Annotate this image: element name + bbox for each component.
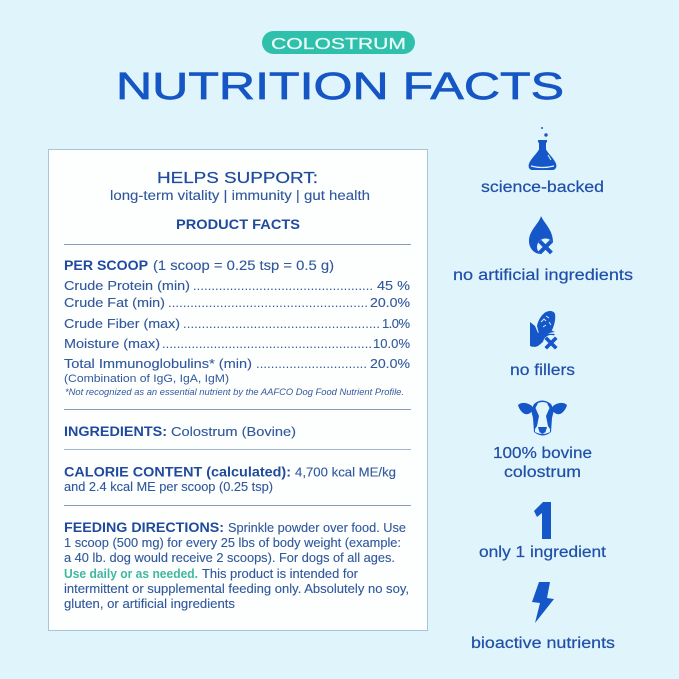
row: total immunoglobulins: Total Immunoglobulins* (min) [64, 356, 252, 371]
benefit: 100% bovine colostrum: colostrum [504, 464, 581, 481]
row: total immunoglobulins: 20.0% [370, 356, 410, 371]
ingredients section [64, 424, 296, 439]
row: crude protein: Crude Protein (min) [64, 278, 190, 293]
row: crude fat: 20.0% [370, 295, 410, 310]
feeding directions section: This product is intended for [202, 567, 358, 581]
per scoop section: (1 scoop = 0.25 tsp = 0.5 g) [153, 258, 334, 273]
row: crude protein: 45 % [377, 278, 410, 293]
row: moisture [64, 336, 410, 351]
feeding directions section: Sprinkle powder over food. Use [228, 521, 406, 535]
feeding directions section: intermittent or supplemental feeding only. Absolutely no soy, [64, 582, 409, 596]
benefit: only 1 ingredient: only 1 ingredient [479, 544, 607, 561]
helps support heading: HELPS SUPPORT: [157, 170, 318, 187]
benefit: 100% bovine colostrum [493, 400, 592, 481]
product facts heading: PRODUCT FACTS [176, 216, 300, 232]
feeding directions section: a 40 lb. dog would receive 2 scoops). For dogs of all ages. [64, 551, 395, 565]
benefits line: long-term vitality | immunity | gut health [110, 188, 370, 203]
row: crude fat: ...................................................... [168, 295, 368, 310]
benefit: bioactive nutrients [471, 582, 615, 652]
feeding directions section: FEEDING DIRECTIONS: [64, 520, 224, 535]
benefit: no artificial ingredients [453, 216, 633, 284]
ingredients section: Colostrum (Bovine) [171, 424, 296, 439]
row: total immunoglobulins [64, 356, 410, 371]
calorie content section: and 2.4 kcal ME per scoop (0.25 tsp) [64, 480, 273, 494]
row: crude fiber: Crude Fiber (max) [64, 316, 180, 331]
calorie content section: CALORIE CONTENT (calculated): [64, 464, 291, 480]
row: crude protein [64, 278, 410, 293]
row: moisture: Moisture (max) [64, 336, 160, 351]
icon: corn with x [530, 311, 559, 351]
feeding directions section: gluten, or artificial ingredients [64, 597, 235, 611]
icon: drop with x [529, 216, 554, 256]
calorie content section: 4,700 kcal ME/kg [295, 466, 396, 480]
feeding directions section [64, 520, 409, 611]
row: crude fiber [64, 316, 410, 331]
panel: product facts label [48, 150, 428, 630]
ingredients section: INGREDIENTS: [64, 424, 167, 439]
row: crude protein: ................................................. [193, 278, 373, 293]
feeding directions section: 1 scoop (500 mg) for every 25 lbs of body weight (example: [64, 536, 401, 550]
benefit: only 1 ingredient [479, 502, 607, 561]
benefit: science-backed: science-backed [481, 179, 604, 196]
category pill: colostrum [262, 31, 415, 54]
row: crude fiber: ..................................................... [183, 316, 380, 331]
benefit: 100% bovine colostrum: 100% bovine [493, 445, 592, 462]
teal highlight: Use daily or as needed. [64, 567, 198, 581]
row: crude fat: Crude Fat (min) [64, 295, 165, 310]
title: NUTRITION FACTS [116, 66, 564, 108]
row: moisture: ......................................................... [162, 336, 372, 351]
benefit: science-backed [481, 127, 604, 196]
per scoop section [64, 258, 410, 397]
per scoop section: PER SCOOP [64, 258, 148, 273]
calorie content section [64, 464, 396, 494]
row: moisture: 10.0% [373, 336, 410, 351]
category pill: colostrum: COLOSTRUM [271, 36, 406, 53]
icon: flask [529, 127, 556, 170]
icon: cow head [518, 400, 567, 436]
benefit: no fillers [510, 311, 575, 379]
row: crude fat [64, 295, 410, 310]
row: crude fiber: 1.0% [382, 316, 410, 331]
AAFCO footnote: *Not recognized as an essential nutrient by the AAFCO Dog Food Nutrient Profile. [65, 387, 404, 397]
benefit: no fillers: no fillers [510, 362, 575, 379]
icon: numeral one [534, 502, 551, 539]
benefit: bioactive nutrients: bioactive nutrients [471, 635, 615, 652]
icon: lightning bolt [532, 582, 554, 623]
benefit: no artificial ingredients: no artificial ingredients [453, 267, 633, 284]
combination note: (Combination of IgG, IgA, IgM) [64, 373, 229, 385]
row: total immunoglobulins: .............................. [256, 356, 367, 371]
